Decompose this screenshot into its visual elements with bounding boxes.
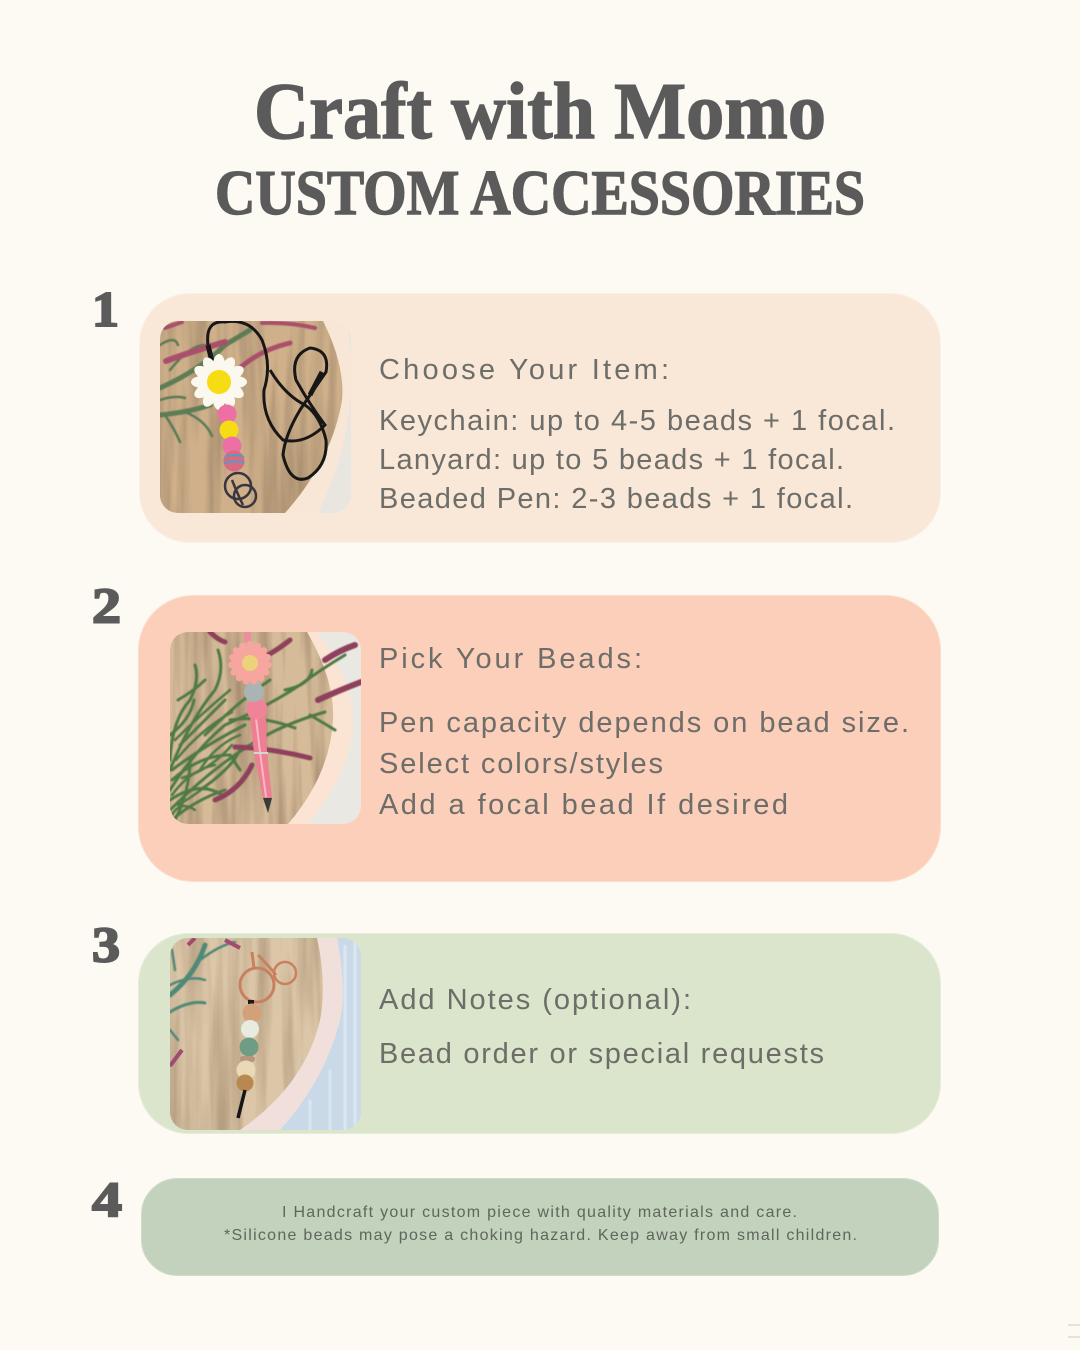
step 2 details bbox=[379, 707, 909, 821]
panel: step 1 choose your item bbox=[140, 294, 940, 542]
step 3 heading: Add Notes (optional): bbox=[379, 984, 691, 1016]
photo: daisy lanyard bbox=[160, 321, 351, 513]
step 1 heading: Choose Your Item: bbox=[379, 354, 669, 386]
panel background bbox=[138, 596, 940, 882]
safety warning text: *Silicone beads may pose a choking hazard. Keep away from small children. bbox=[224, 1227, 857, 1244]
panel: step 3 add notes bbox=[138, 934, 940, 1134]
step 2 details: Select colors/styles bbox=[379, 748, 663, 780]
daisy focal bbox=[191, 354, 247, 410]
beads bbox=[218, 404, 236, 424]
step 1 details bbox=[379, 405, 895, 515]
step 1 number: 1 bbox=[92, 281, 119, 337]
step 2 number: 2 bbox=[92, 577, 121, 633]
step 1 details: Keychain: up to 4-5 beads + 1 focal. bbox=[379, 405, 895, 437]
brand heading: Craft with Momo bbox=[254, 68, 826, 156]
step 2 details: Pen capacity depends on bead size. bbox=[379, 707, 909, 739]
title bbox=[215, 68, 865, 228]
panel: step 2 pick your beads bbox=[138, 596, 940, 882]
panel background bbox=[142, 1178, 938, 1276]
black cord bbox=[208, 321, 327, 479]
step 1 details: Beaded Pen: 2-3 beads + 1 focal. bbox=[379, 483, 853, 515]
flower focal bbox=[228, 641, 272, 685]
panel background bbox=[138, 934, 940, 1134]
step 4 number: 4 bbox=[92, 1171, 122, 1227]
step 2 details: Add a focal bead If desired bbox=[379, 789, 788, 821]
step 1 details: Lanyard: up to 5 beads + 1 focal. bbox=[379, 444, 844, 476]
step 3 details: Bead order or special requests bbox=[379, 1038, 824, 1070]
greenery and sprigs bbox=[160, 322, 315, 442]
handcraft note text: I Handcraft your custom piece with quality materials and care. bbox=[282, 1204, 797, 1221]
panel: step 4 handcraft note bbox=[142, 1178, 938, 1276]
step 3 number: 3 bbox=[92, 916, 120, 972]
key rings bbox=[225, 473, 256, 507]
step 2 heading: Pick Your Beads: bbox=[379, 643, 642, 675]
hardware bbox=[240, 952, 296, 1002]
panel background bbox=[140, 294, 940, 542]
pen bbox=[244, 632, 251, 642]
greenery bbox=[170, 650, 345, 820]
subtitle: CUSTOM ACCESSORIES bbox=[215, 157, 865, 228]
photo: keychain with tan and green beads bbox=[170, 938, 361, 1130]
greenery bbox=[170, 942, 235, 1040]
photo: pink flower pen bbox=[170, 632, 361, 824]
beads bbox=[248, 1000, 254, 1004]
